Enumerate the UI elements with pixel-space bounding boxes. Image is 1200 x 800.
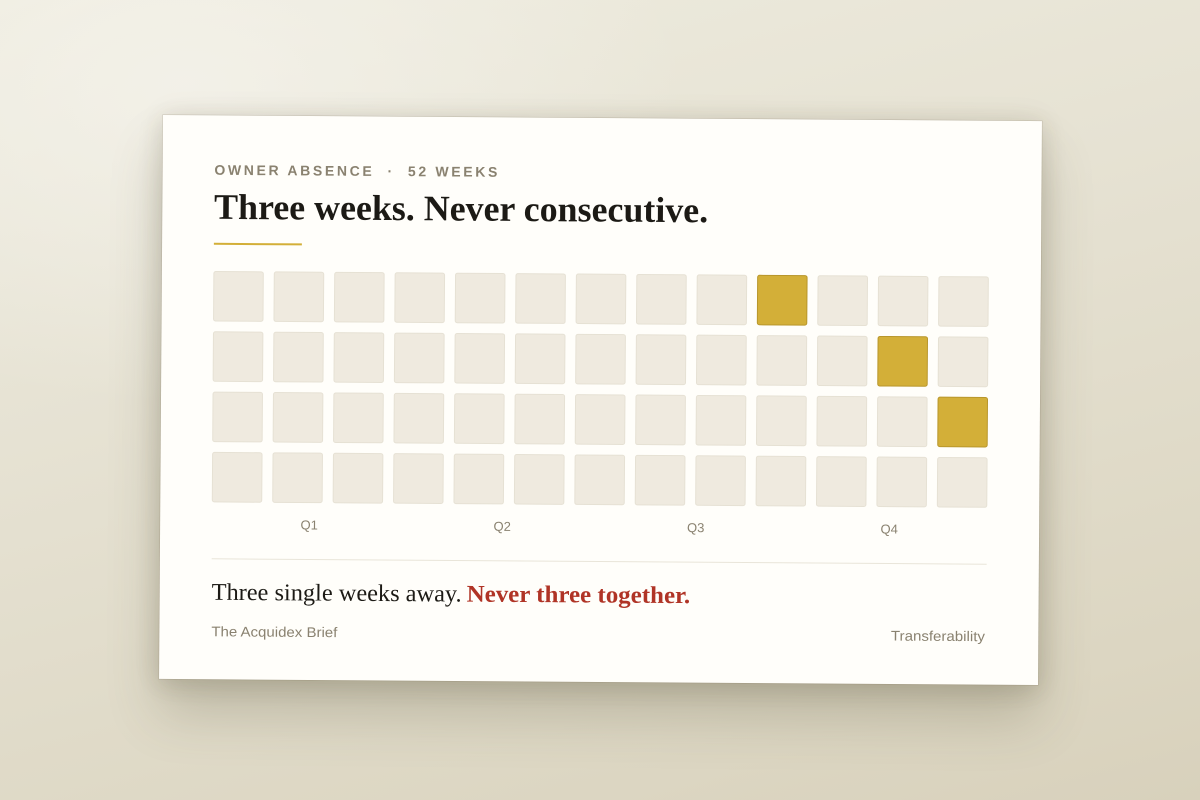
- takeaway sentence: Never three together.: [466, 582, 690, 610]
- divider: [211, 559, 986, 565]
- title: Three weeks. Never consecutive.: [213, 187, 708, 231]
- footer tag: Transferability: [890, 628, 985, 645]
- quarter labels: Q1: [300, 518, 317, 533]
- week grid: [212, 272, 988, 508]
- quarter labels: [300, 518, 897, 537]
- accent rule: [213, 243, 301, 246]
- panel: card: [159, 115, 1041, 685]
- takeaway sentence: [211, 580, 690, 610]
- quarter labels: Q3: [686, 520, 704, 536]
- quarter labels: Q2: [493, 519, 510, 534]
- footer source: The Acquidex Brief: [211, 624, 337, 641]
- takeaway sentence: Three single weeks away.: [211, 580, 461, 608]
- eyebrow label: OWNER ABSENCE · 52 WEEKS: [214, 162, 497, 180]
- quarter labels: Q4: [880, 522, 897, 537]
